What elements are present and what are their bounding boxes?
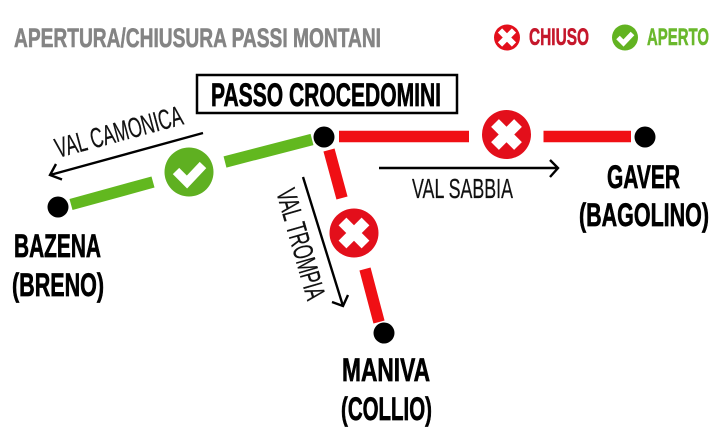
node: maniva bbox=[374, 322, 394, 344]
heading box: passo crocedomini bbox=[197, 75, 457, 113]
place label: maniva bbox=[341, 352, 432, 427]
place label: maniva: MANIVA bbox=[342, 352, 430, 388]
arrow: val sabbia bbox=[379, 160, 558, 177]
arrow: val camonica bbox=[50, 133, 203, 180]
title: APERTURA/CHIUSURA PASSI MONTANI bbox=[14, 23, 381, 53]
icon: closed status bbox=[482, 110, 531, 159]
icon: open status bbox=[164, 148, 214, 196]
place label: gaver bbox=[579, 159, 709, 233]
route: val sabbia closed bbox=[339, 110, 631, 159]
route: val camonica open bbox=[71, 140, 312, 204]
legend label: chiuso: CHIUSO bbox=[529, 24, 589, 51]
place label: gaver: GAVER bbox=[607, 159, 680, 195]
node: crocedomini bbox=[314, 126, 334, 148]
arrow: val trompia bbox=[303, 177, 348, 306]
icon: open bbox=[612, 24, 638, 50]
place label: bazena: (BRENO) bbox=[12, 267, 104, 303]
label: val camonica: VAL CAMONICA bbox=[52, 100, 186, 164]
icon: closed status bbox=[330, 208, 378, 258]
node: bazena bbox=[48, 196, 68, 218]
label: val sabbia: VAL SABBIA bbox=[412, 173, 513, 204]
place label: maniva: (COLLIO) bbox=[341, 391, 432, 427]
route: val trompia closed bbox=[329, 150, 379, 322]
node: gaver bbox=[634, 126, 656, 148]
place label: bazena bbox=[12, 228, 104, 303]
heading box: passo crocedomini: PASSO CROCEDOMINI bbox=[211, 77, 441, 113]
place label: bazena: BAZENA bbox=[14, 228, 101, 264]
legend: aperto bbox=[612, 24, 709, 51]
icon: closed bbox=[494, 24, 520, 50]
legend: chiuso bbox=[494, 24, 589, 51]
label: val trompia: VAL TROMPIA bbox=[270, 185, 332, 303]
